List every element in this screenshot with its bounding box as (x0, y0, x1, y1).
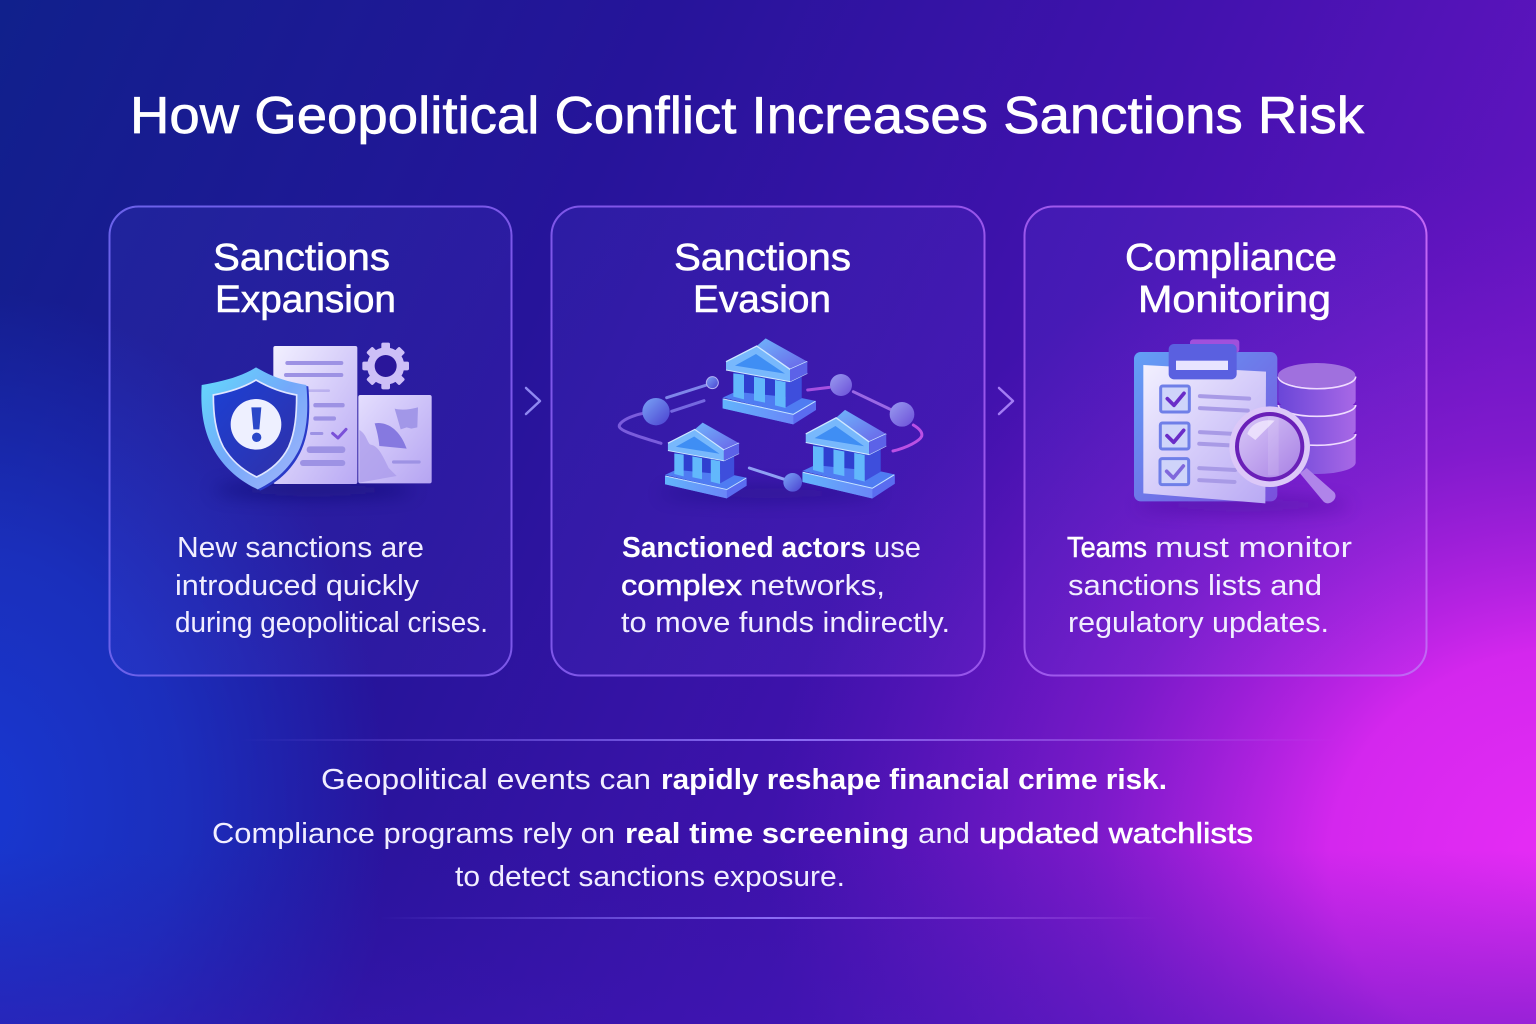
text: expansion description: during geopolitical crises. (175, 607, 488, 639)
text: monitoring description: sanctions lists and (1068, 570, 1322, 602)
text block: conclusion: real time screening (625, 818, 909, 850)
text: expansion description: New sanctions are (177, 532, 424, 564)
heading: sanctions evasion (674, 237, 851, 321)
text block: conclusion: Compliance programs rely on (212, 818, 615, 850)
text block: conclusion: Geopolitical events can (321, 764, 651, 796)
text: evasion description (621, 532, 950, 639)
text: evasion description: to move funds indirectly. (621, 607, 950, 639)
icon: gear (362, 343, 409, 389)
text: evasion description: complex (621, 570, 743, 602)
text: evasion description: Sanctioned actors (622, 532, 866, 564)
text: expansion description (175, 532, 488, 639)
text: monitoring description: regulatory updates. (1068, 607, 1329, 639)
heading: compliance monitoring: Compliance (1125, 237, 1337, 279)
arrow: expansion to evasion (526, 388, 540, 414)
text: evasion description: networks, (750, 570, 885, 602)
heading: sanctions expansion: Expansion (215, 279, 396, 321)
icon: right bank (802, 410, 895, 498)
text: monitoring description: must monitor (1155, 532, 1352, 564)
icon: top bank (723, 338, 816, 424)
heading: sanctions expansion: Sanctions (213, 237, 390, 279)
text block: conclusion: and (918, 818, 970, 850)
arrow: evasion to monitoring (999, 388, 1013, 414)
icon: network of banks (619, 338, 922, 500)
panel: compliance monitoring (1024, 206, 1426, 676)
heading: sanctions evasion: Evasion (693, 279, 831, 321)
text: monitoring description (1067, 532, 1352, 639)
divider: bottom rule (380, 917, 1160, 919)
icon: database (1278, 363, 1356, 474)
icon: clipboard, magnifier and database (1134, 339, 1356, 512)
panel: sanctions expansion (110, 206, 512, 676)
text: monitoring description: Teams (1067, 532, 1147, 564)
divider: top rule (240, 739, 1340, 741)
title: How Geopolitical Conflict Increases Sanctions Risk (130, 87, 1365, 145)
text block: conclusion: rapidly reshape financial crime risk. (661, 764, 1167, 796)
icon: magnifier (1229, 406, 1336, 503)
heading: compliance monitoring (1125, 237, 1337, 321)
heading: sanctions expansion (213, 237, 396, 321)
text: expansion description: introduced quickly (175, 570, 420, 602)
text block: conclusion: to detect sanctions exposure. (455, 861, 845, 893)
heading: sanctions evasion: Sanctions (674, 237, 851, 279)
icon: shield with documents, gear and map (201, 343, 432, 497)
panel: sanctions evasion (552, 206, 984, 676)
icon: left bank (665, 423, 747, 498)
text block: conclusion (212, 764, 1253, 893)
text: evasion description: use (874, 532, 921, 564)
text block: conclusion: updated watchlists (979, 818, 1253, 850)
heading: compliance monitoring: Monitoring (1138, 279, 1331, 321)
